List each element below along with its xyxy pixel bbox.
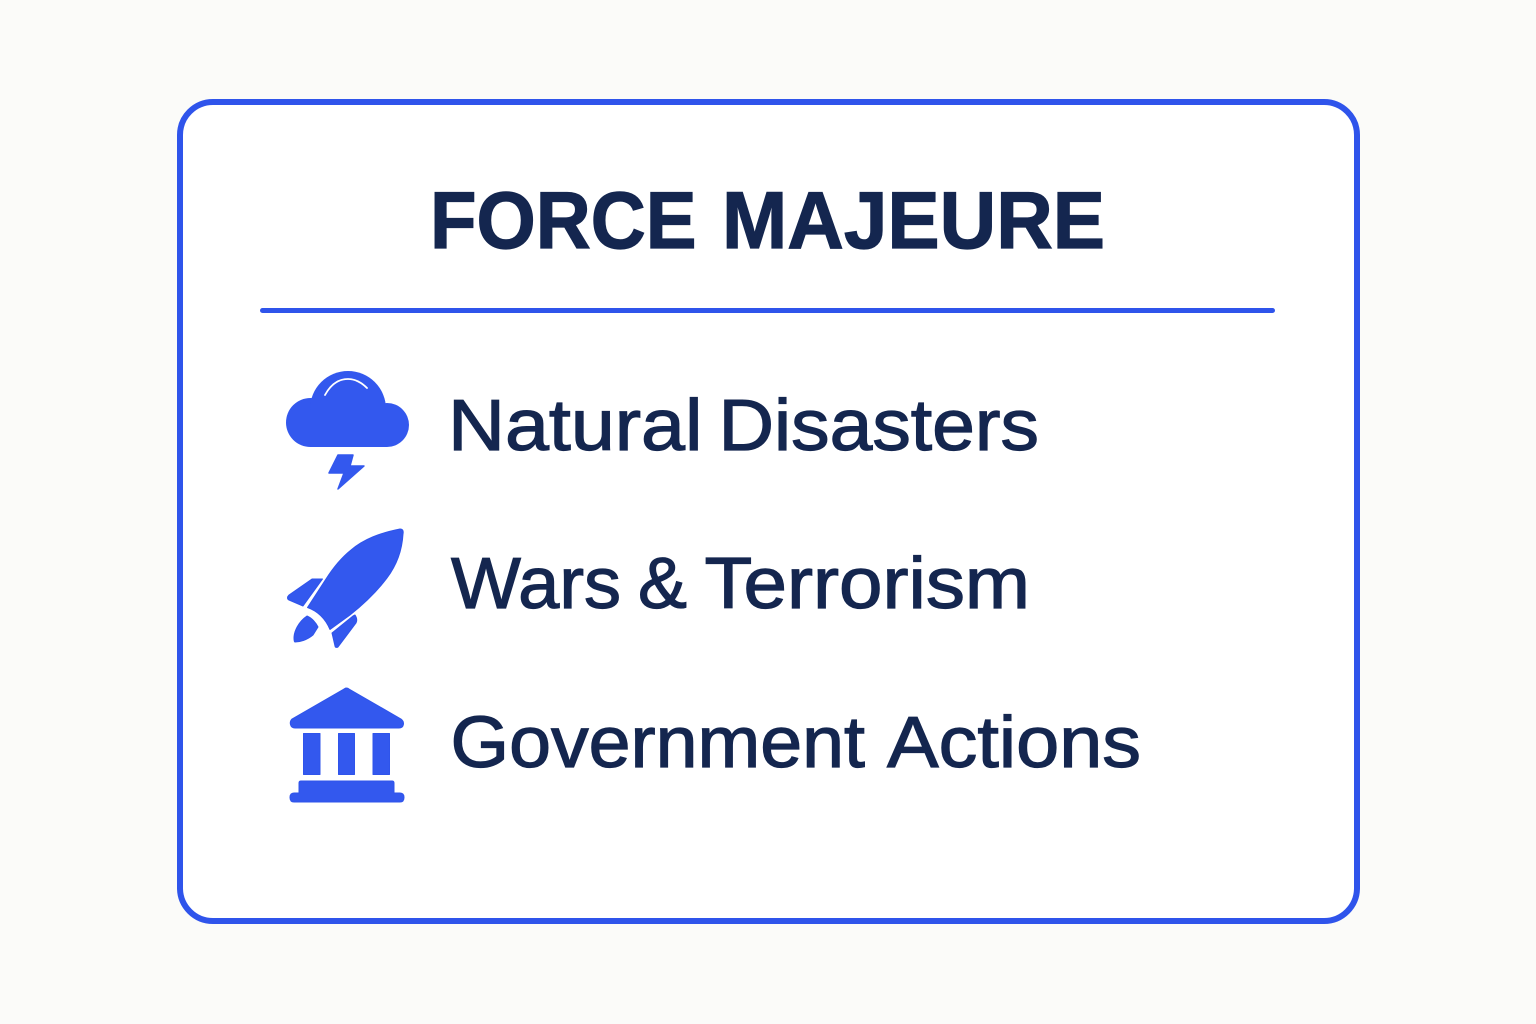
label: government actions (450, 703, 1141, 783)
title (430, 176, 1105, 266)
label: wars and terrorism: & (638, 544, 687, 624)
title: MAJEURE (722, 176, 1105, 266)
divider (260, 308, 1275, 313)
label: government actions: Actions (887, 703, 1141, 783)
label: wars and terrorism: Terrorism (704, 544, 1030, 624)
label: wars and terrorism: Wars (451, 544, 621, 624)
label: natural disasters (448, 386, 1039, 466)
panel: force majeure card (180, 102, 1357, 921)
label: natural disasters: Disasters (718, 386, 1039, 466)
icon: storm cloud with lightning (286, 371, 409, 489)
label: wars and terrorism (451, 544, 1030, 624)
title: FORCE (430, 176, 696, 266)
label: government actions: Government (450, 703, 865, 783)
icon: government building (290, 688, 404, 802)
label: natural disasters: Natural (448, 386, 702, 466)
icon: rocket (288, 529, 403, 647)
